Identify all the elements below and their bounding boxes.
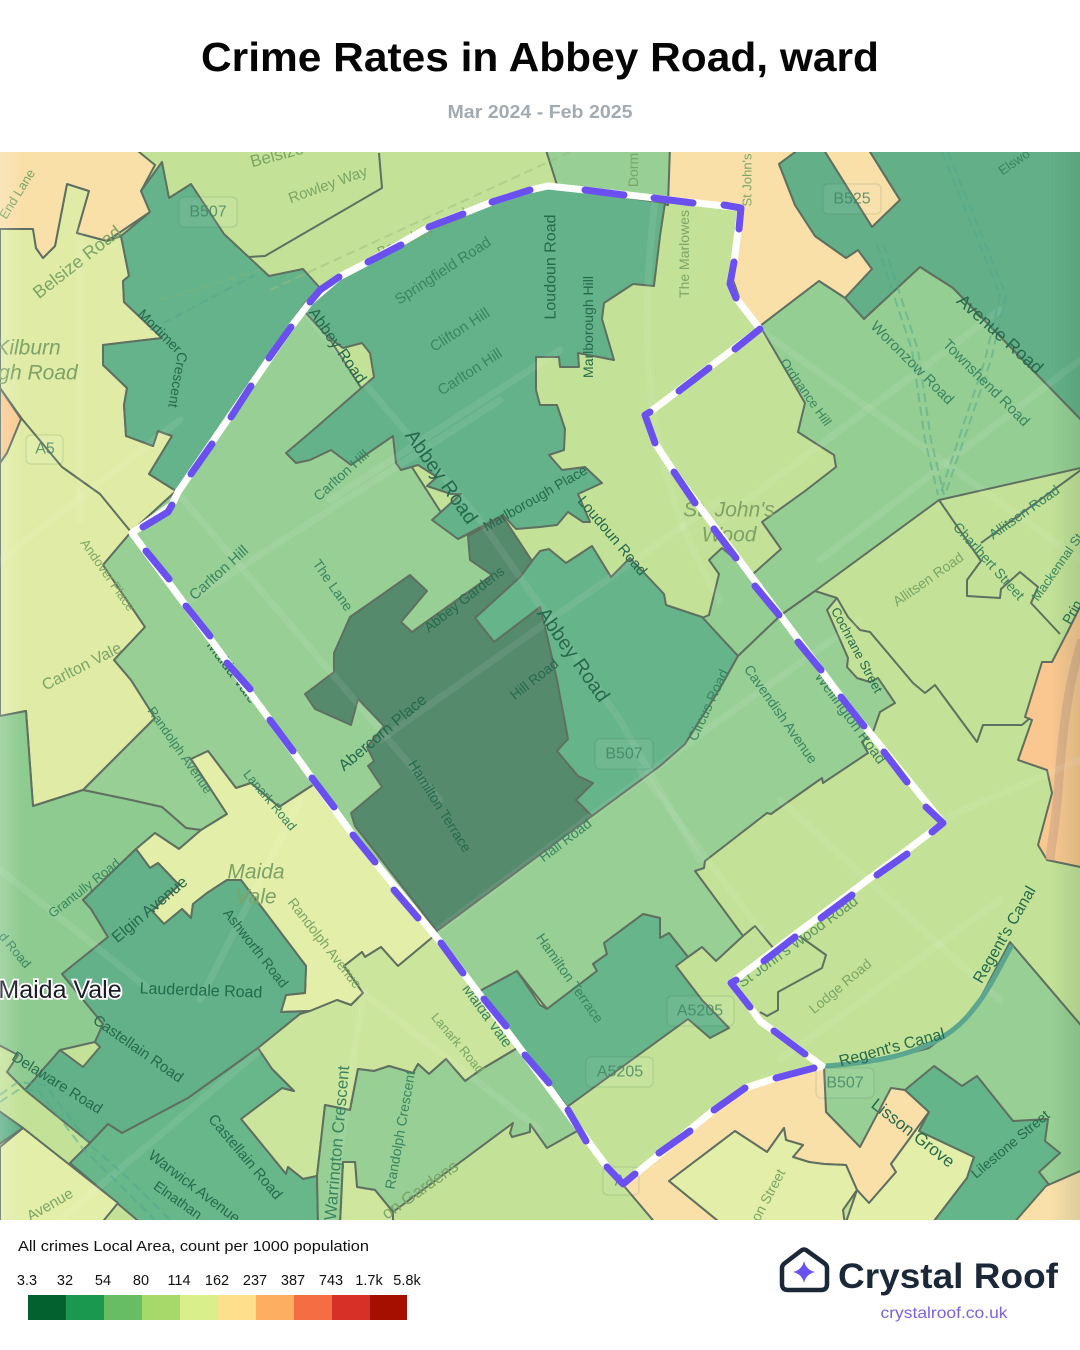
- street and place labels: Regent's Canal: [837, 1026, 947, 1070]
- street and place labels: Carlton Hill: [310, 446, 372, 504]
- legend title: All crimes Local Area, count per 1000 population: [18, 1239, 369, 1255]
- street and place labels: Elgin Avenue: [109, 873, 191, 946]
- street and place labels: Loudoun Road: [542, 215, 560, 319]
- street and place labels: Lanark Road: [240, 767, 300, 833]
- street and place labels: on Gardens: [378, 1157, 462, 1223]
- street and place labels: Wood: [702, 524, 758, 546]
- legend scale values: [17, 1273, 421, 1289]
- street and place labels: Hall Road: [536, 815, 594, 865]
- street and place labels: Regent's Canal: [970, 884, 1040, 986]
- street and place labels: Cochrane Street: [828, 605, 886, 696]
- street and place labels: Randolph Avenue: [285, 895, 365, 992]
- website link: crystalroof.co.uk: [880, 1305, 1009, 1322]
- street and place labels: Andover Place: [78, 536, 138, 614]
- street and place labels: Maida Vale: [203, 637, 261, 707]
- street and place labels: Grantully Road: [45, 855, 123, 921]
- street and place labels: Ashworth Road: [220, 905, 292, 991]
- street and place labels: Ordnance Hill: [777, 355, 835, 429]
- street and place labels: St. John's: [683, 498, 775, 522]
- street and place labels: Wellington Road: [811, 669, 889, 767]
- street and place labels: Cavendish Avenue: [741, 662, 821, 766]
- icon: house with star: [782, 1250, 827, 1290]
- street and place labels: gh Road: [0, 362, 79, 384]
- street and place labels: Charlbert Street: [950, 519, 1028, 603]
- legend scale values: 162: [205, 1273, 229, 1289]
- street and place labels: Abbey Gardens: [421, 563, 507, 635]
- street and place labels: Lisson Grove: [868, 1095, 958, 1171]
- road number badges: A5: [35, 440, 55, 458]
- street and place labels: St John's: [740, 153, 754, 207]
- street and place labels: on Street: [748, 1166, 788, 1224]
- ward boundary: white line with violet dashes: [132, 186, 943, 1184]
- subtitle: date range: Mar 2024 - Feb 2025: [448, 101, 632, 122]
- street and place labels: Lodge Road: [806, 955, 874, 1017]
- legend scale values: 3.3: [17, 1273, 37, 1289]
- road number badges: B507: [189, 204, 227, 220]
- road network overlays: [0, 200, 1080, 1220]
- street and place labels: Hamilton Terrace: [405, 757, 475, 855]
- street and place labels: Warwick Avenue: [145, 1147, 243, 1227]
- legend scale values: 5.8k: [393, 1273, 421, 1289]
- legend scale values: 54: [95, 1273, 111, 1289]
- railway dashed lines: [0, 152, 1006, 1220]
- street and place labels: Allitsen Road: [890, 549, 966, 609]
- street and place labels: Dorm: [625, 153, 641, 187]
- street and place labels: Crescent: [165, 351, 191, 409]
- legend colour swatches: [28, 1295, 407, 1320]
- street and place labels: Marlborough Place: [480, 462, 590, 534]
- street and place labels: Clifton Hill: [427, 304, 493, 356]
- street and place labels: Loudoun Road: [574, 493, 650, 579]
- street and place labels: Abbey Road: [400, 426, 482, 528]
- street and place labels: The Marlowes: [676, 210, 692, 298]
- street and place labels: Carlton Hill: [186, 542, 252, 604]
- legend scale values: 1.7k: [355, 1273, 383, 1289]
- wordmark: Crystal Roof: [838, 1257, 1058, 1296]
- legend scale values: 32: [57, 1273, 73, 1289]
- street and place labels: Vale: [235, 886, 277, 908]
- street and place labels: Rowley Way: [286, 163, 370, 207]
- road number badges: B525: [833, 190, 871, 208]
- street and place labels: Elswo: [995, 146, 1033, 178]
- street and place labels: Carlton Hill: [435, 345, 505, 399]
- legend scale values: 80: [133, 1273, 149, 1289]
- street and place labels: Boundary Road: [375, 204, 469, 260]
- road number badges: [26, 184, 881, 1195]
- street and place labels: The Lane: [309, 556, 357, 614]
- street and place labels: Elnathan: [151, 1178, 205, 1222]
- street and place labels: Hamilton Terrace: [533, 930, 607, 1026]
- street and place labels: Carlton Vale: [39, 640, 125, 694]
- street and place labels: Abbey Road: [532, 604, 614, 706]
- panel: Crystal Roof logo: [782, 1250, 1058, 1322]
- road number badges: A5205: [677, 1002, 723, 1020]
- legend scale values: 387: [281, 1273, 305, 1289]
- legend scale values: 237: [243, 1273, 267, 1289]
- street and place labels: Castellain Road: [204, 1111, 286, 1203]
- street and place labels: Avenue: [24, 1185, 76, 1225]
- street and place labels: Townshend Road: [939, 336, 1033, 430]
- street and place labels: Randolph Avenue: [144, 704, 216, 796]
- legend scale values: 743: [319, 1273, 343, 1289]
- street and place labels: Lilestone Street: [968, 1107, 1052, 1181]
- crime-rate area polygons: [0, 147, 1080, 1225]
- road number badges: B507: [605, 746, 643, 762]
- Regent's Canal: [826, 945, 1012, 1066]
- street and place labels: Abbey Road: [305, 305, 369, 387]
- street and place labels: Belsize: [248, 139, 306, 171]
- street and place labels: Castellain Road: [90, 1012, 186, 1086]
- map edge shading: [0, 152, 1080, 1220]
- street and place labels: Lanark Road: [428, 1010, 488, 1076]
- street and place labels: Circus Road: [684, 667, 732, 743]
- road number badges: B507: [826, 1074, 864, 1092]
- panel: legend: [17, 1239, 421, 1320]
- street and place labels: Randolph Crescent: [382, 1069, 418, 1190]
- street and place labels: Woronzow Road: [867, 318, 957, 408]
- road number badges: A: [615, 1172, 626, 1190]
- street and place labels: Marlborough Hill: [580, 276, 596, 378]
- street and place labels: Lauderdale Road: [139, 980, 263, 1002]
- street and place labels: Maida Vale: [0, 976, 122, 1004]
- street and place labels: Maida: [227, 860, 285, 884]
- street and place labels: Mortimer: [135, 306, 185, 356]
- title: Crime Rates in Abbey Road, ward: [201, 34, 879, 80]
- street and place labels: Belsize Road: [29, 221, 125, 303]
- street and place labels: Allitsen Road: [986, 482, 1062, 542]
- street and place labels: Abercorn Place: [336, 691, 430, 775]
- street and place labels: Avenue Road: [953, 290, 1047, 378]
- street and place labels: St John's Wood Road: [735, 893, 861, 991]
- legend scale values: 114: [167, 1273, 191, 1289]
- street and place labels: Springfield Road: [392, 234, 494, 308]
- railway cutting stripe on orange area: [1050, 640, 1080, 860]
- road number badges: A5205: [597, 1064, 643, 1080]
- street and place labels: Hill Road: [507, 655, 561, 703]
- street and place labels: Maida Vale: [458, 981, 516, 1051]
- street and place labels: Delaware Road: [9, 1048, 105, 1118]
- street and place labels: Warrington Crescent: [321, 1065, 353, 1221]
- boundary lines between lime areas: [0, 153, 1080, 1016]
